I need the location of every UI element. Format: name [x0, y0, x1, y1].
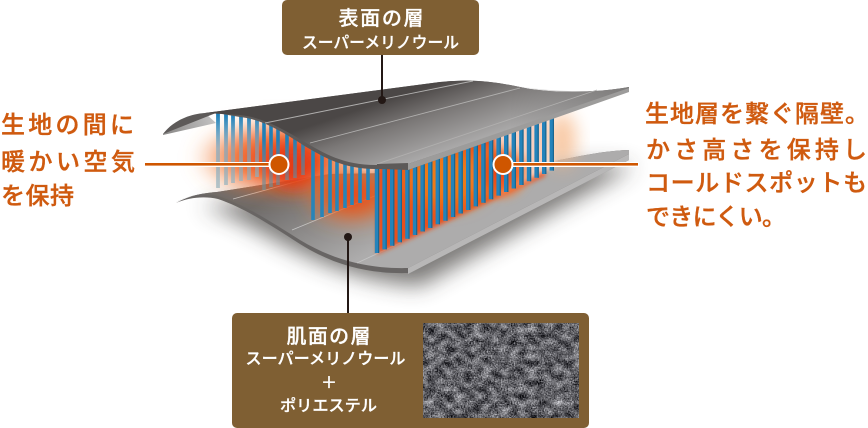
panel: surface layer: スーパーメリノウール [302, 34, 459, 52]
warm air glow: orange core [403, 150, 487, 206]
connecting fibers: front row [377, 110, 553, 253]
label: warm air between fabric: 生地の間に [1, 112, 134, 139]
connecting fibers: back left row [218, 112, 257, 188]
panel: surface layer [282, 0, 479, 55]
label: warm air between fabric [1, 112, 135, 210]
drop shadow under fabric [200, 165, 635, 286]
warm air glow: right outer fade [548, 112, 576, 168]
panel: surface layer: 表面の層 [338, 7, 424, 30]
fabric texture swatch [423, 323, 579, 418]
leader line: top layer [378, 55, 386, 104]
connecting fibers: back middle row [264, 120, 303, 190]
connecting fibers: back right row [313, 145, 368, 220]
panel: skin layer: ＋ [321, 375, 337, 392]
callout marker: right [494, 155, 639, 174]
label: connecting partition [645, 101, 868, 231]
warm air glow: red spot behind right marker [466, 140, 534, 204]
label: connecting partition: かさ高さを保持し [646, 137, 867, 164]
label: warm air between fabric: を保持 [1, 183, 74, 210]
label: warm air between fabric: 暖かい空気 [1, 149, 135, 176]
warm air glow: left red core [267, 144, 323, 188]
bottom fabric layer [176, 150, 629, 274]
warm air glow: back panel behind front fibers [377, 108, 545, 254]
top fabric layer [163, 81, 629, 170]
panel: skin layer: 肌面の層 [286, 326, 370, 348]
label: connecting partition: できにくい。 [646, 204, 786, 231]
panel: skin layer: ポリエステル [280, 397, 377, 415]
label: connecting partition: 生地層を繋ぐ隔壁。 [645, 101, 868, 128]
panel: skin layer [232, 313, 589, 428]
leader line: skin layer [344, 233, 352, 313]
warm air glow: left [192, 116, 368, 200]
callout marker: left [145, 155, 288, 174]
panel: skin layer: スーパーメリノウール [246, 350, 406, 368]
warm air glow: centre [300, 160, 404, 228]
warm air glow: pale fade on right side [495, 112, 556, 195]
label: connecting partition: コールドスポットも [646, 170, 867, 197]
